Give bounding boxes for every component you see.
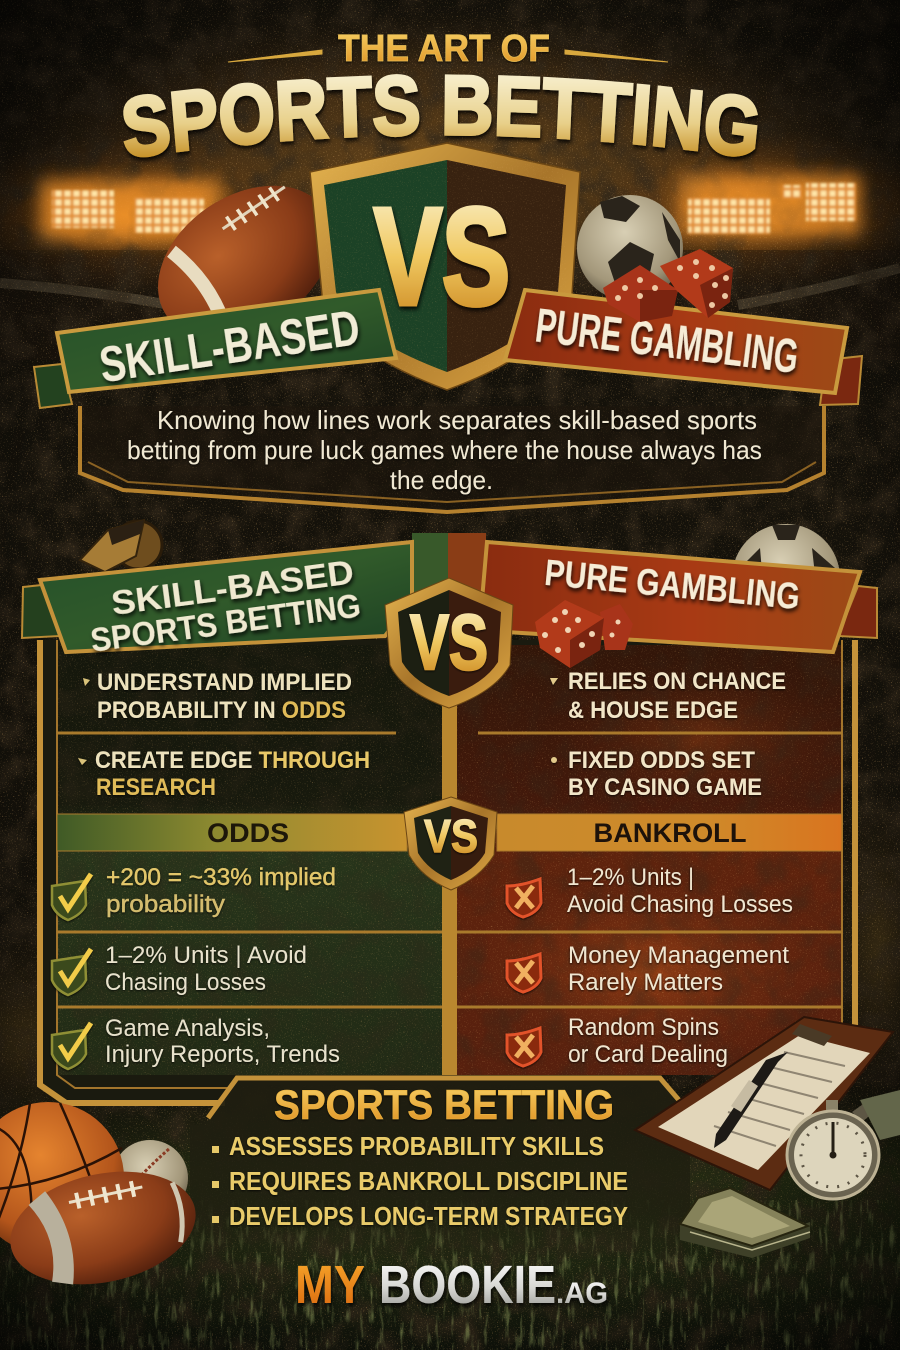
panel: sports betting summary: ASSESSES PROBABILITY SKILLS: [229, 1131, 604, 1161]
label: Bankroll: BANKROLL: [594, 818, 746, 848]
title: Sports Betting: SPORTS BETTING: [123, 74, 760, 163]
VS shield: main: [310, 143, 580, 390]
VS shield: section: [385, 578, 513, 708]
row: odds check three: [52, 1015, 340, 1069]
row: odds check two: Chasing Losses: [105, 969, 266, 996]
panel frame: [40, 640, 855, 1103]
row: odds check three: Injury Reports, Trends: [105, 1041, 340, 1068]
icon: dice in header: [535, 600, 633, 668]
panel: intro text: the edge.: [390, 465, 493, 495]
header: Skill-Based Sports Betting: SPORTS BETTING: [88, 587, 363, 659]
panel: intro text: betting from pure luck games where the house always has: [127, 435, 762, 465]
panel: sports betting summary: [190, 1078, 690, 1265]
icon: baseball: [112, 1140, 188, 1216]
header: Skill-Based Sports Betting: [40, 542, 412, 659]
row: bankroll cross one: [507, 864, 793, 918]
row: odds check three: Game Analysis,: [105, 1015, 270, 1042]
header: Pure Gambling: [482, 542, 860, 652]
header: Pure Gambling: PURE GAMBLING: [543, 552, 802, 617]
icon: american football: [129, 154, 361, 370]
icon: dice: [603, 249, 733, 322]
label: Odds: ODDS: [207, 818, 289, 848]
icon: soccer ball behind header: [732, 524, 840, 632]
ribbon tails: hero banners: [34, 356, 862, 408]
header: Skill-Based Sports Betting: SKILL-BASED: [109, 553, 356, 623]
logo: MyBookie.ag: MY: [295, 1255, 365, 1315]
icon: money stack: [680, 1090, 900, 1258]
row: odds check two: [52, 942, 307, 996]
icon: stopwatch: [787, 1100, 879, 1199]
panel: sports betting summary: DEVELOPS LONG-TERM STRATEGY: [229, 1201, 628, 1231]
icon: soccer ball: [577, 195, 683, 301]
row: bankroll cross three: or Card Dealing: [568, 1041, 728, 1068]
row: odds check one: [52, 864, 336, 920]
column: pure gambling background: [457, 645, 842, 1075]
title: The Art Of: THE ART OF: [338, 28, 550, 70]
list: skill-based points: UNDERSTAND IMPLIED: [97, 669, 352, 696]
list: pure gambling points: BY CASINO GAME: [568, 774, 762, 801]
icon: basketball: [0, 1102, 124, 1254]
VS shield: main: VS: [374, 180, 510, 334]
band: odds: [57, 814, 407, 851]
panel: sports betting summary: SPORTS BETTING: [274, 1081, 614, 1128]
panel: intro text: [80, 405, 824, 512]
list: skill-based points: [78, 669, 370, 801]
row: odds check two: 1–2% Units | Avoid: [105, 942, 307, 969]
band: bankroll: [497, 814, 842, 851]
row: bankroll cross three: Random Spins: [568, 1014, 719, 1041]
row: bankroll cross three: [507, 1014, 728, 1068]
column: skill-based background: [57, 645, 442, 1075]
row: bankroll cross one: Avoid Chasing Losses: [567, 891, 793, 918]
icon: whistle: [80, 520, 162, 572]
panel: intro text: Knowing how lines work separates skill-based sports: [157, 405, 757, 435]
title: The Art Of: [228, 28, 668, 70]
list: skill-based points: RESEARCH: [96, 774, 216, 801]
logo: MyBookie.ag: BOOKIE: [379, 1255, 556, 1315]
list: pure gambling points: & HOUSE EDGE: [568, 697, 738, 724]
VS shield: small: VS: [424, 810, 478, 862]
list: skill-based points: CREATE EDGE THROUGH: [95, 747, 370, 774]
icon: clipboard and pen: [635, 1017, 893, 1190]
row: odds check one: +200 = ~33% implied: [106, 864, 336, 891]
VS shield: section: VS: [410, 598, 488, 686]
banner: Pure Gambling: [505, 290, 847, 393]
icon: football bottom: [0, 1156, 206, 1300]
list: pure gambling points: [550, 668, 786, 801]
row: odds check one: probability: [106, 891, 225, 918]
logo: MyBookie.ag: .AG: [556, 1277, 608, 1310]
icon: stadium lights: [40, 175, 860, 240]
banner: Skill-Based: SKILL-BASED: [96, 299, 363, 393]
row: bankroll cross two: Money Management: [568, 942, 789, 969]
list: pure gambling points: RELIES ON CHANCE: [568, 668, 786, 695]
list: pure gambling points: FIXED ODDS SET: [568, 747, 755, 774]
list: skill-based points: PROBABILITY IN ODDS: [97, 697, 346, 724]
ribbon tails: section headers: [22, 585, 877, 638]
panel: sports betting summary: REQUIRES BANKROLL DISCIPLINE: [229, 1166, 628, 1196]
logo: MyBookie.ag: [295, 1255, 608, 1315]
row: bankroll cross two: Rarely Matters: [568, 969, 723, 996]
VS shield: small: [404, 797, 497, 890]
row: bankroll cross one: 1–2% Units |: [567, 864, 694, 891]
panel: comparison table: [40, 533, 855, 1103]
row: bankroll cross two: [507, 942, 789, 996]
